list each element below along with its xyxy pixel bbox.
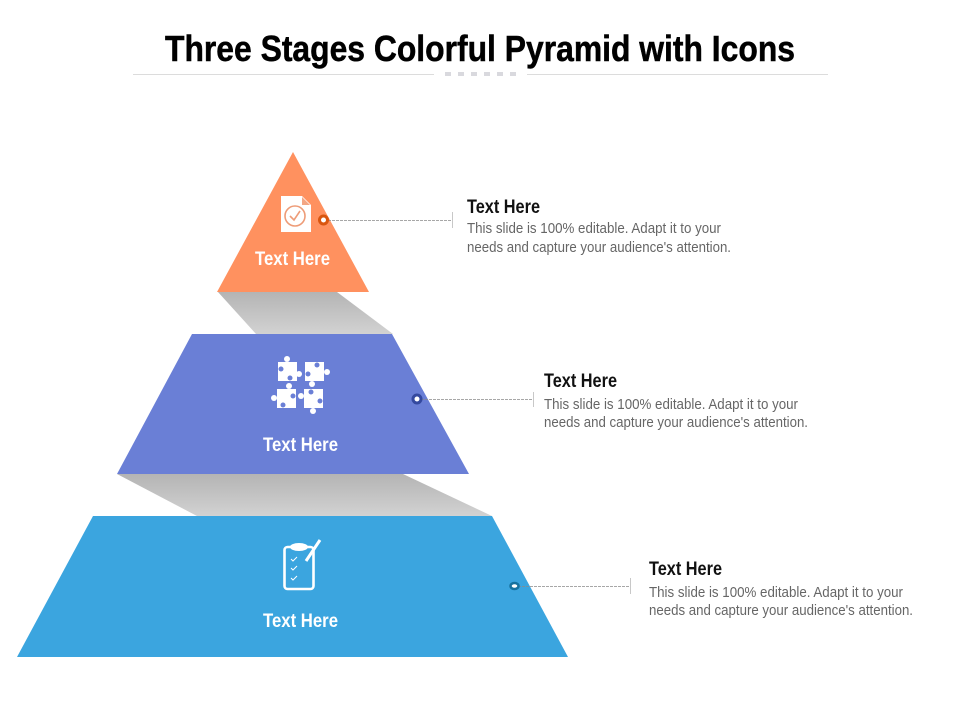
text block: top tier [467, 197, 731, 256]
icon: document with check [281, 196, 311, 232]
label: middle tier: Text Here [263, 435, 338, 456]
text block: top tier: Text Here [467, 197, 540, 218]
title: Three Stages Colorful Pyramid with Icons [165, 28, 795, 69]
text block: middle tier: Text Here [544, 371, 617, 392]
text block: top tier: This slide is 100% editable. Adapt it to your [467, 220, 721, 237]
panel: top pyramid tier [217, 152, 369, 292]
label: top tier: Text Here [255, 249, 330, 270]
text block: bottom tier [649, 559, 913, 619]
connector: top tier [320, 212, 452, 228]
text block: middle tier: needs and capture your audience's attention. [544, 414, 808, 431]
panel: middle pyramid tier [117, 334, 469, 474]
connector: middle tier [413, 392, 534, 407]
icon: puzzle pieces [271, 356, 330, 414]
shadow: top to middle tier [218, 292, 393, 334]
text block: bottom tier: Text Here [649, 559, 722, 580]
text block: bottom tier: This slide is 100% editable. Adapt it to your [649, 584, 903, 601]
text block: bottom tier: needs and capture your audience's attention. [649, 602, 913, 619]
text block: middle tier [544, 371, 808, 431]
connector: bottom tier [510, 578, 630, 594]
title divider [133, 72, 828, 76]
text block: top tier: needs and capture your audience's attention. [467, 239, 731, 256]
shadow: middle to bottom tier [117, 474, 492, 516]
text block: middle tier: This slide is 100% editable. Adapt it to your [544, 396, 798, 413]
icon: clipboard with checklist [284, 540, 320, 589]
panel: bottom pyramid tier [17, 516, 568, 657]
label: bottom tier: Text Here [263, 611, 338, 632]
